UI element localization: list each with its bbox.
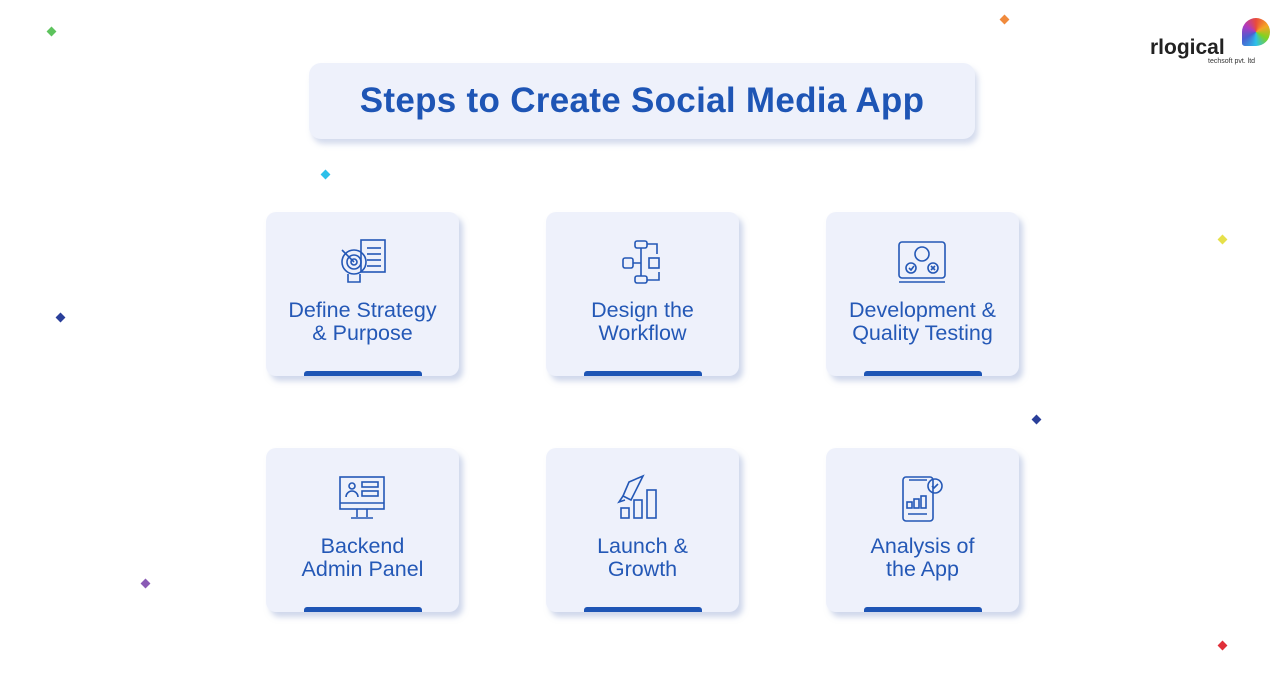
card: analysis: Analysis of [871,534,974,558]
card: design workflow: Workflow [598,321,686,345]
icon: logo leaf [1242,18,1270,46]
card: define strategy: & Purpose [312,321,413,345]
card: analysis: the App [886,557,959,581]
icon: monitor [339,476,385,519]
icon: rocket bars [617,474,657,519]
card: define strategy: Define Strategy [288,298,437,322]
card: backend admin [266,448,459,612]
card: launch growth: Growth [608,557,677,581]
card: design workflow [546,212,739,376]
logo: techsoft pvt. ltd [1208,58,1255,65]
icon: workflow [622,240,660,284]
logo text: rlogical [1150,36,1225,59]
card: backend admin: Backend [321,534,404,558]
logo [1150,18,1270,65]
icon: clipboard chart [902,476,943,522]
card: development: Development & [849,298,996,322]
card: launch growth [546,448,739,612]
card: analysis [826,448,1019,612]
title: Steps to Create Social Media App [360,81,924,120]
icon: laptop gear [898,241,946,283]
card: development: Quality Testing [852,321,993,345]
card: backend admin: Admin Panel [302,557,423,581]
card: development [826,212,1019,376]
card: define strategy [266,212,459,376]
card: design workflow: Design the [591,298,694,322]
card: launch growth: Launch & [597,534,688,558]
title [309,63,975,139]
icon: bulb target [341,239,386,283]
